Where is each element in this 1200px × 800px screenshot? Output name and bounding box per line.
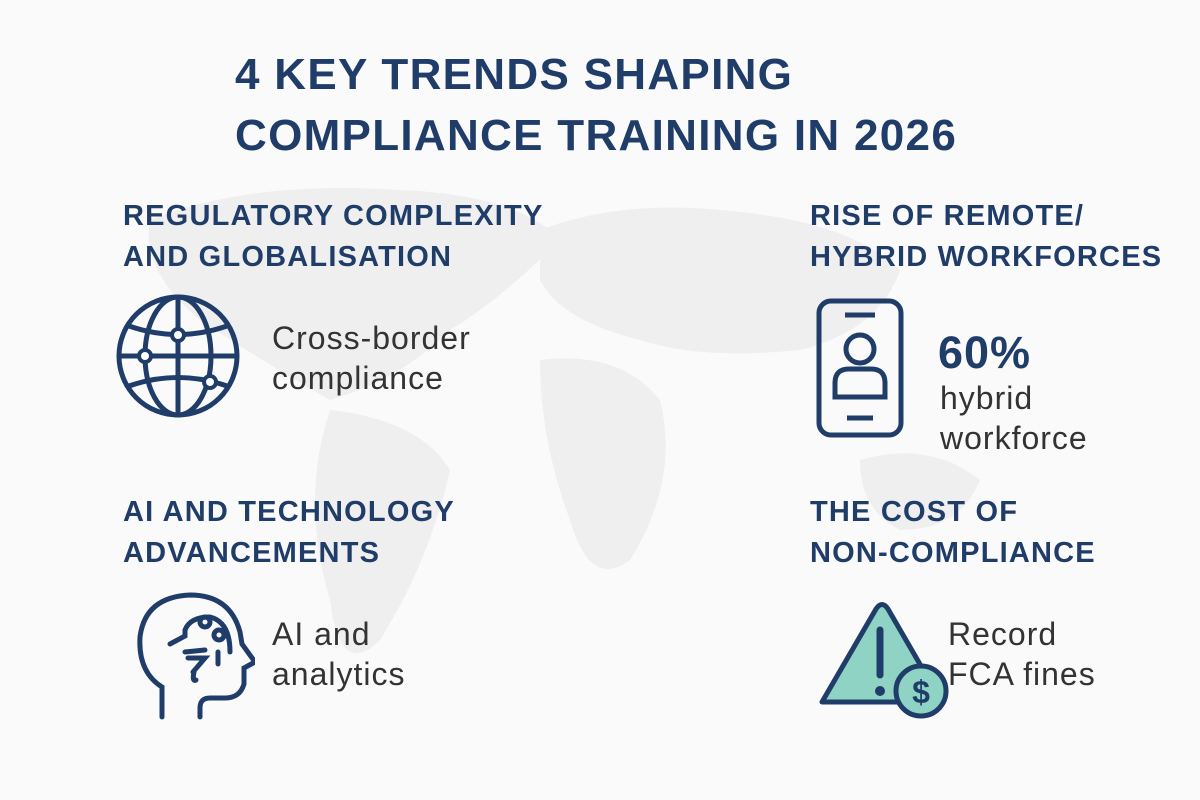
heading: AI: AI AND TECHNOLOGY <box>123 496 455 528</box>
icon: warning with dollar: $ <box>912 674 930 710</box>
heading: cost: THE COST OF <box>810 496 1018 528</box>
text: cross-border <box>272 320 471 396</box>
stat: 60%: 60% <box>938 327 1031 378</box>
heading: remote <box>810 200 1162 273</box>
icon: phone <box>816 298 904 438</box>
heading: remote: RISE OF REMOTE/ <box>810 200 1084 232</box>
text: cross-border: Cross-border <box>272 320 471 356</box>
heading: regulatory: REGULATORY COMPLEXITY <box>123 200 544 232</box>
heading: regulatory <box>123 200 544 273</box>
heading: cost <box>810 496 1096 569</box>
text: cross-border: compliance <box>272 360 444 396</box>
icon: head <box>137 592 255 720</box>
heading: remote: HYBRID WORKFORCES <box>810 241 1162 273</box>
text: AI analytics: analytics <box>272 656 406 692</box>
title <box>235 50 957 160</box>
text: AI analytics <box>272 616 406 692</box>
heading: AI: ADVANCEMENTS <box>123 537 380 569</box>
title: COMPLIANCE TRAINING IN 2026 <box>235 111 957 160</box>
text: hybrid workforce: hybrid <box>940 380 1033 416</box>
icon: warning with dollar <box>820 602 948 718</box>
text: hybrid workforce: workforce <box>940 420 1088 456</box>
text: FCA fines: Record <box>948 616 1057 652</box>
heading: regulatory: AND GLOBALISATION <box>123 241 452 273</box>
text: FCA fines <box>948 616 1096 692</box>
heading: cost: NON-COMPLIANCE <box>810 537 1096 569</box>
text: AI analytics: AI and <box>272 616 371 652</box>
text: FCA fines: FCA fines <box>948 656 1096 692</box>
icon: globe <box>116 294 240 418</box>
title: 4 KEY TRENDS SHAPING <box>235 50 793 99</box>
heading: AI <box>123 496 455 569</box>
text: hybrid workforce <box>940 380 1088 456</box>
